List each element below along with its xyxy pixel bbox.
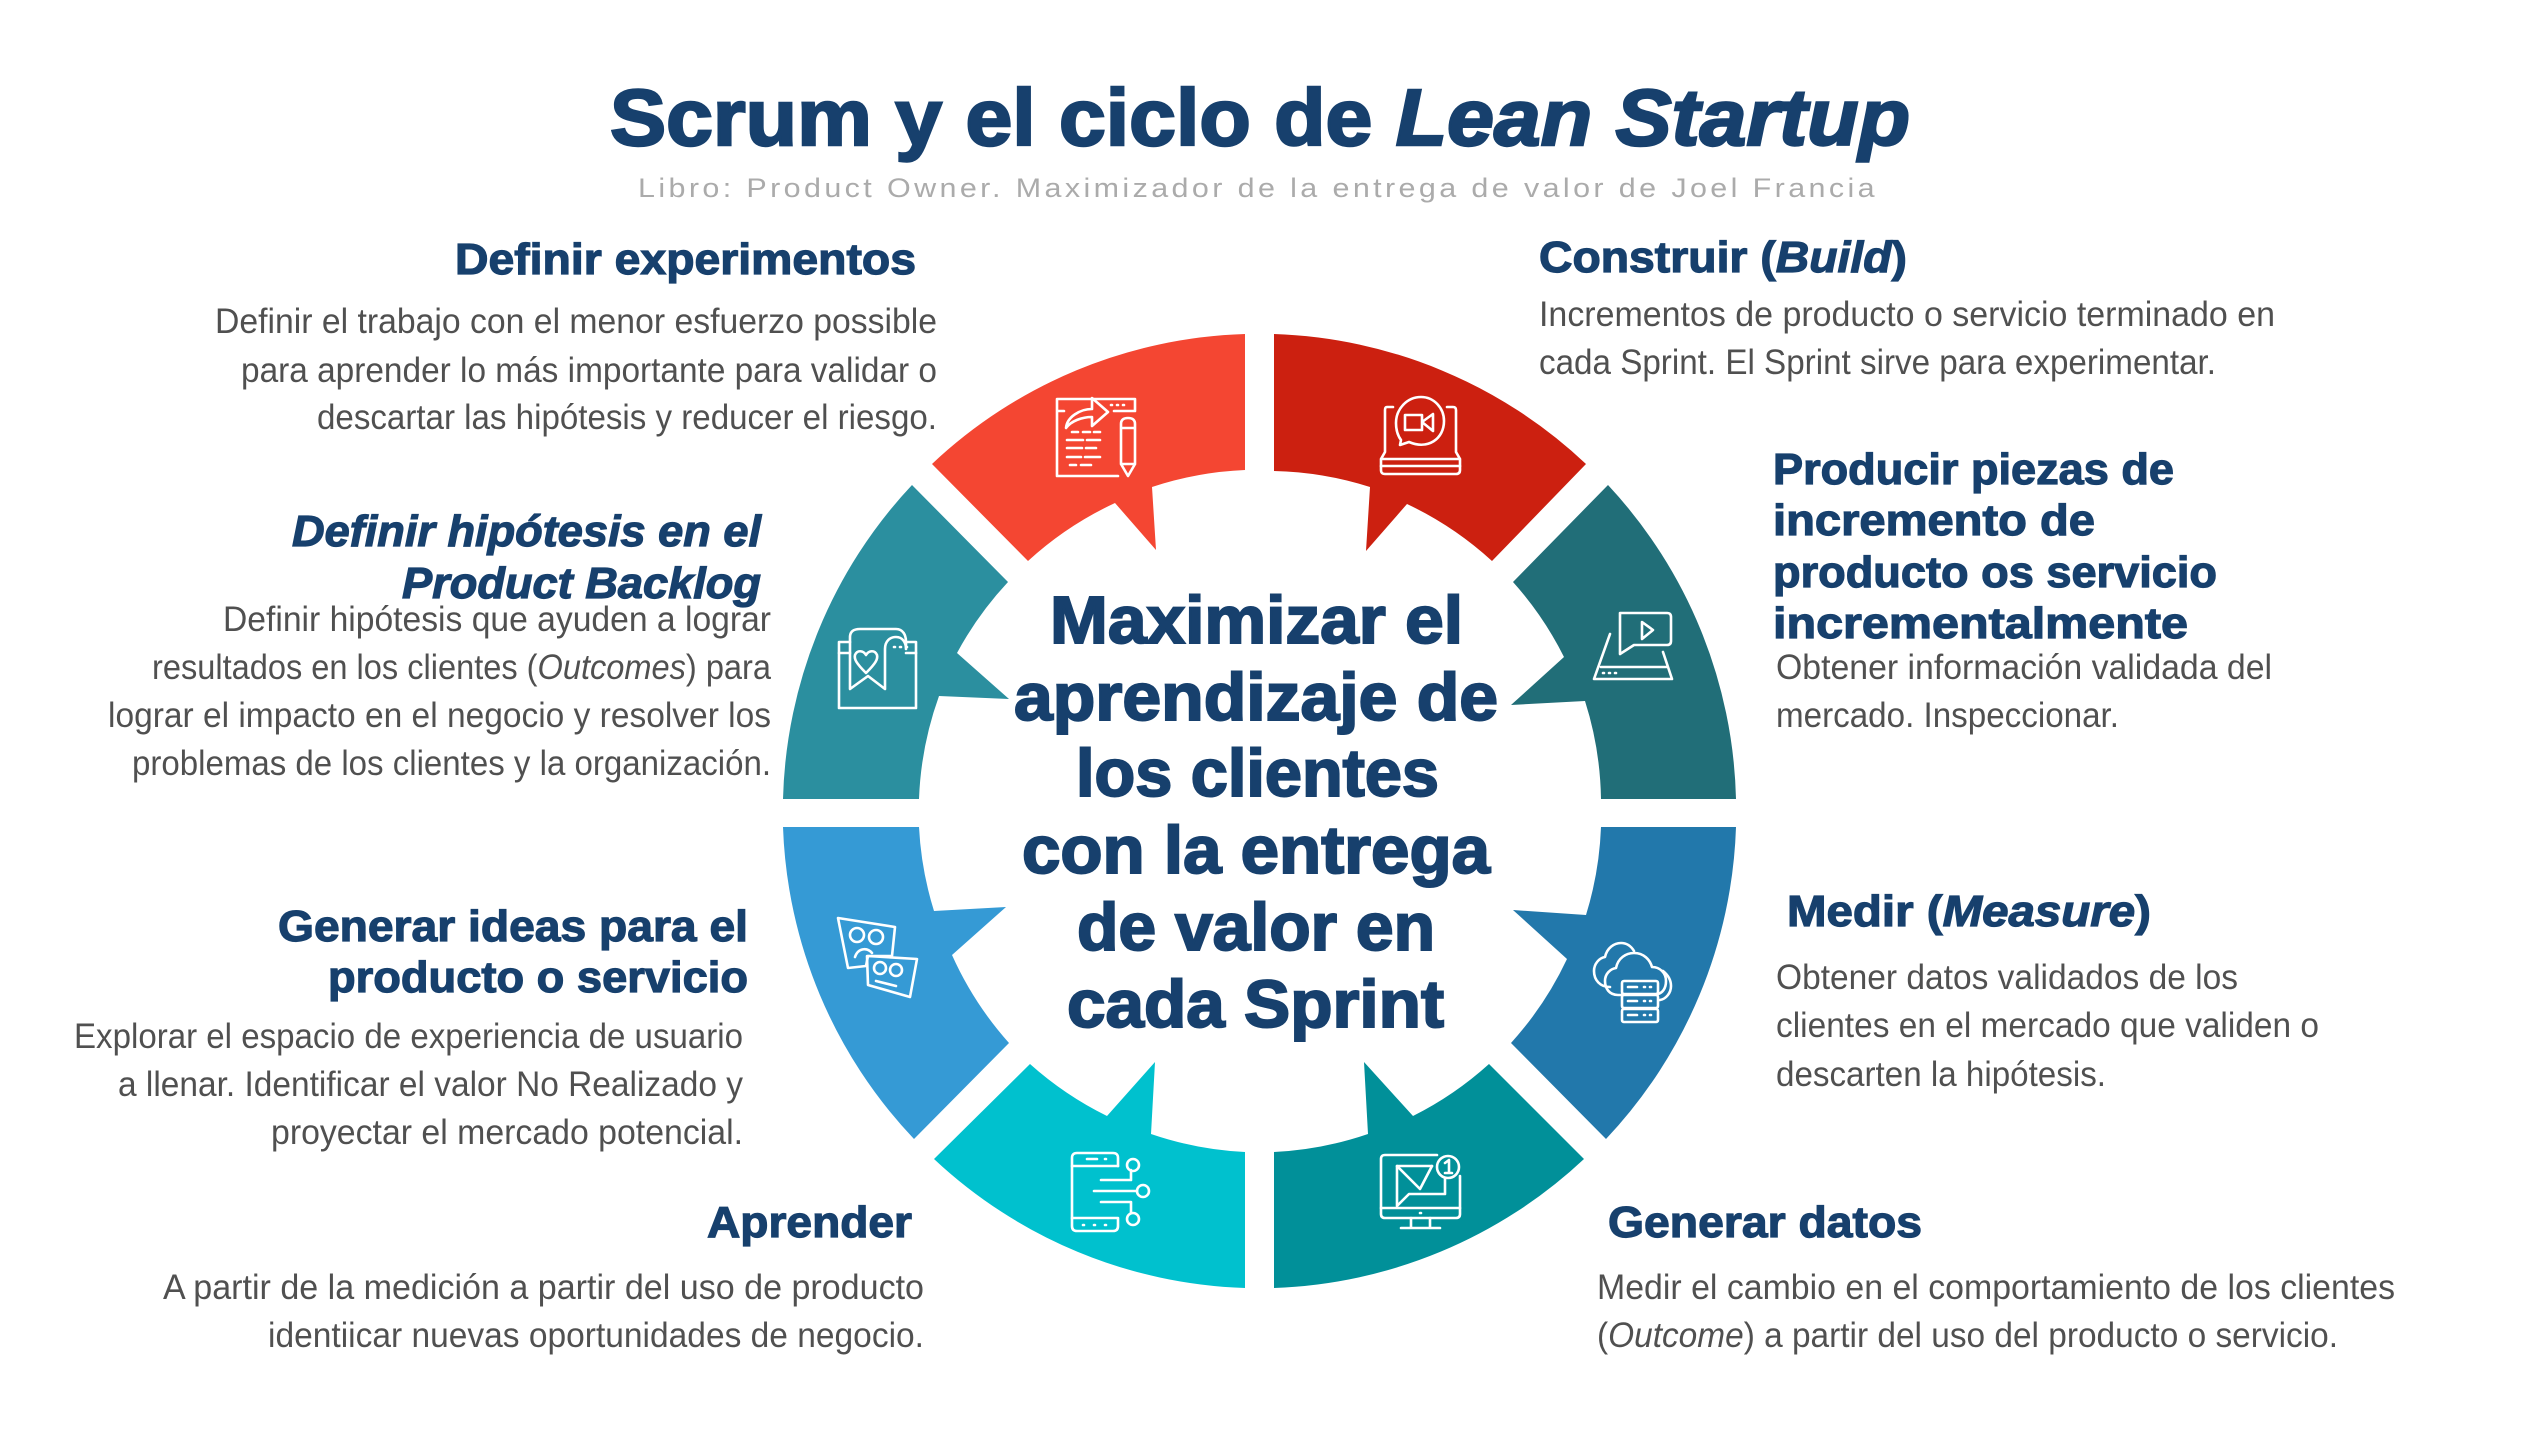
description: clientes en el mercado que validen o bbox=[1776, 1006, 2319, 1045]
segment: construir bbox=[1274, 334, 1586, 561]
segment: producir bbox=[1511, 485, 1736, 799]
heading: Aprender bbox=[707, 1198, 912, 1247]
segment: medir bbox=[1511, 827, 1736, 1139]
description bbox=[1776, 648, 2272, 735]
icon: face cards bbox=[838, 918, 917, 997]
icon: cloud servers bbox=[1594, 943, 1671, 1022]
text block: generar datos bbox=[1597, 1198, 2395, 1355]
heading: Medir ( Measure ) bbox=[1787, 887, 2151, 936]
description: identiicar nuevas oportunidades de negocio. bbox=[268, 1316, 924, 1355]
heading: producto o servicio bbox=[328, 953, 748, 1002]
center text: con la entrega bbox=[1022, 813, 1491, 888]
description: A partir de la medición a partir del uso de producto bbox=[163, 1268, 924, 1307]
description: Definir hipótesis que ayuden a lograr bbox=[223, 600, 771, 639]
icon: phone with nodes bbox=[1072, 1153, 1149, 1231]
center text: de valor en bbox=[1077, 890, 1435, 965]
description: mercado. Inspeccionar. bbox=[1776, 696, 2119, 735]
description: Definir el trabajo con el menor esfuerzo possible bbox=[215, 302, 937, 341]
description: problemas de los clientes y la organización. bbox=[132, 744, 771, 783]
description bbox=[163, 1268, 924, 1355]
icon: document with arrow and pencil bbox=[1057, 398, 1135, 476]
center text: cada Sprint bbox=[1067, 967, 1444, 1042]
description: Explorar el espacio de experiencia de usuario bbox=[74, 1017, 743, 1056]
description: cada Sprint. El Sprint sirve para experimentar. bbox=[1539, 343, 2216, 382]
segment: aprender bbox=[934, 1062, 1245, 1288]
heading: Definir hipótesis en el bbox=[292, 507, 762, 556]
heading: Product Backlog bbox=[402, 559, 761, 608]
description bbox=[215, 302, 937, 437]
description bbox=[1776, 958, 2319, 1094]
heading: Definir experimentos bbox=[455, 235, 916, 284]
description: Obtener datos validados de los bbox=[1776, 958, 2238, 997]
text block: generar ideas bbox=[74, 902, 748, 1152]
description: Medir el cambio en el comportamiento de los clientes bbox=[1597, 1268, 2395, 1307]
description: (Outcome) a partir del uso del producto o servicio. bbox=[1597, 1316, 2338, 1355]
text block: producir piezas bbox=[1773, 445, 2272, 735]
heading: incremento de bbox=[1773, 496, 2095, 545]
description bbox=[74, 1017, 743, 1152]
description: lograr el impacto en el negocio y resolver los bbox=[108, 696, 771, 735]
description: resultados en los clientes (Outcomes) para bbox=[152, 648, 771, 687]
description: descarten la hipótesis. bbox=[1776, 1055, 2106, 1094]
text block: aprender bbox=[163, 1198, 924, 1355]
description: Obtener información validada del bbox=[1776, 648, 2272, 687]
text block: definir experimentos bbox=[215, 235, 937, 437]
heading: incrementalmente bbox=[1773, 599, 2188, 648]
center text bbox=[1014, 583, 1498, 1042]
subtitle: Libro: Product Owner. Maximizador de la entrega de valor de Joel Francia bbox=[638, 173, 1878, 203]
heading bbox=[1773, 445, 2217, 648]
text block: medir bbox=[1776, 887, 2319, 1094]
segment: generar ideas bbox=[783, 827, 1009, 1139]
description: Incrementos de producto o servicio terminado en bbox=[1539, 295, 2275, 334]
description: a llenar. Identificar el valor No Realizado y bbox=[118, 1065, 743, 1104]
icon: play bubble on platform bbox=[1594, 613, 1672, 679]
cycle diagram bbox=[783, 334, 1736, 1288]
heading: producto os servicio bbox=[1773, 548, 2217, 597]
heading: Producir piezas de bbox=[1773, 445, 2174, 494]
center text: Maximizar el bbox=[1050, 583, 1463, 658]
heading: Generar datos bbox=[1608, 1198, 1922, 1247]
description: descartar las hipótesis y reducer el riesgo. bbox=[317, 398, 937, 437]
description: proyectar el mercado potencial. bbox=[271, 1113, 743, 1152]
segment: generar datos bbox=[1274, 1062, 1584, 1288]
center text: los clientes bbox=[1076, 736, 1439, 811]
description bbox=[1597, 1268, 2395, 1355]
segment: definir experimentos bbox=[932, 334, 1245, 561]
heading: Construir ( Build) bbox=[1539, 233, 1907, 282]
center text: aprendizaje de bbox=[1014, 660, 1498, 735]
icon: bookmark with heart bbox=[839, 629, 916, 708]
description: para aprender lo más importante para validar o bbox=[241, 351, 937, 390]
text block: definir hipotesis bbox=[108, 507, 771, 783]
icon: laptop with video bubble bbox=[1381, 397, 1460, 474]
description bbox=[108, 600, 771, 783]
heading bbox=[292, 507, 762, 608]
segment: definir hipotesis bbox=[783, 485, 1009, 799]
icon: monitor with mail bbox=[1381, 1155, 1460, 1228]
title: Scrum y el ciclo de Lean Startup bbox=[610, 73, 1910, 162]
heading bbox=[278, 902, 748, 1002]
description bbox=[1539, 295, 2275, 382]
text block: construir bbox=[1539, 233, 2275, 382]
heading: Generar ideas para el bbox=[278, 902, 748, 951]
